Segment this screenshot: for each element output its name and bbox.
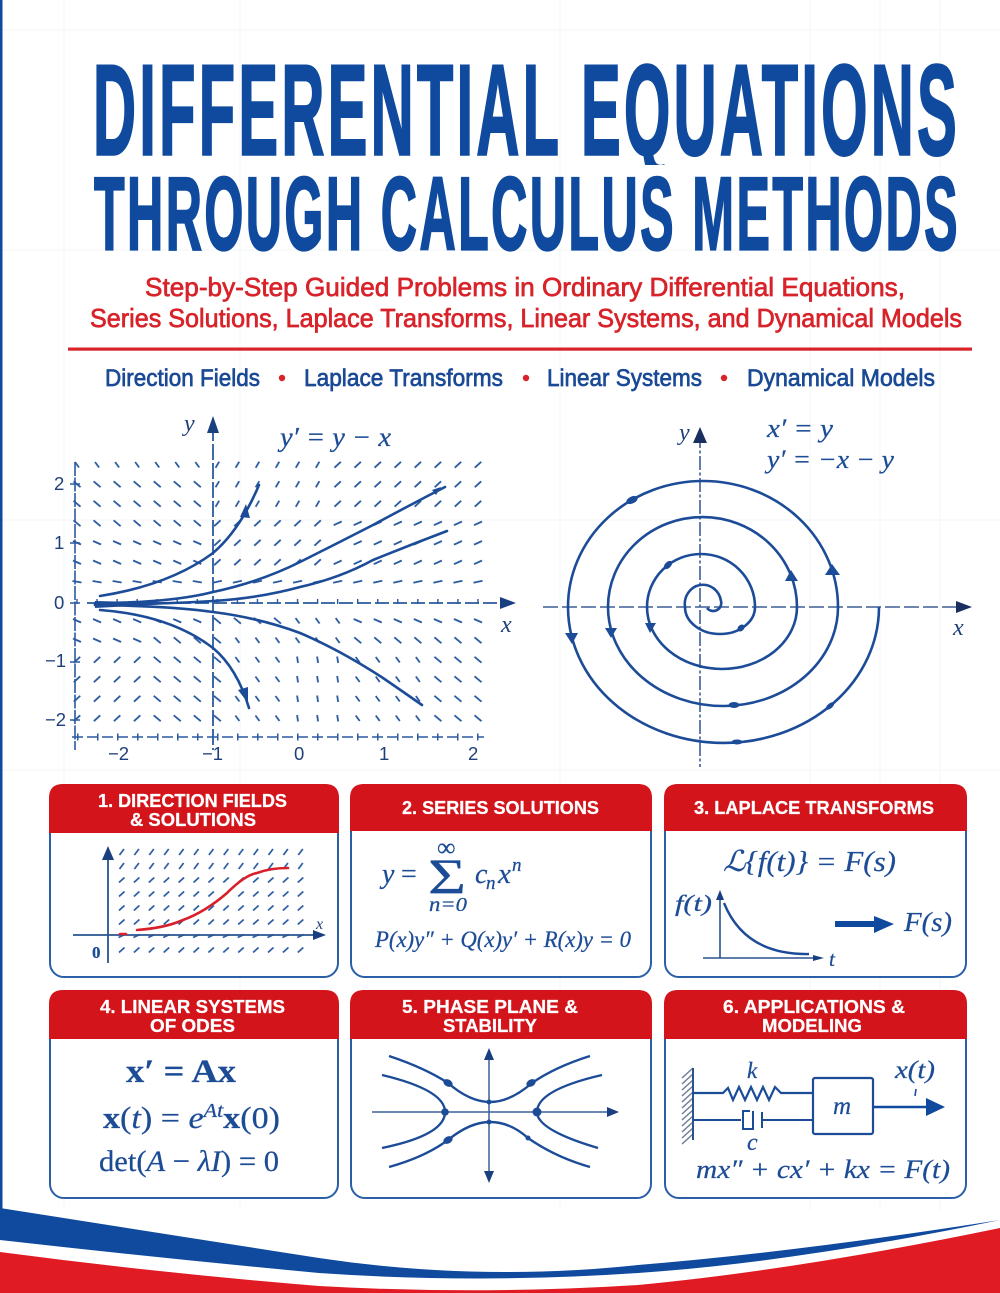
laplace formula: ℒ{f(t)} = F(s) bbox=[723, 846, 896, 878]
direction markers bbox=[565, 494, 840, 744]
topic navigation row: Direction Fields bbox=[105, 365, 260, 392]
panel 3: laplace transforms bbox=[664, 784, 967, 977]
F(s) label: F(s) bbox=[903, 907, 952, 937]
series formula: n bbox=[486, 873, 496, 894]
panel 4 heading bbox=[100, 997, 285, 1036]
topic navigation row: Laplace Transforms bbox=[304, 365, 503, 392]
axis labels: 1 bbox=[54, 532, 64, 553]
axis labels: −2 bbox=[108, 743, 129, 764]
matrix equations: det(A − λI) = 0 bbox=[99, 1145, 279, 1178]
axis labels: 2 bbox=[468, 743, 478, 764]
panel 6 heading: MODELING bbox=[762, 1016, 862, 1036]
chart: spiral phase portrait bbox=[543, 414, 972, 767]
series formula: n bbox=[512, 855, 522, 876]
panel 5 heading: 5. PHASE PLANE & bbox=[402, 997, 578, 1017]
equation of motion: mx″ + cx′ + kx = F(t) bbox=[696, 1155, 950, 1184]
panel 2 heading: 2. SERIES SOLUTIONS bbox=[402, 798, 599, 818]
panel 6: applications and modeling bbox=[664, 990, 967, 1198]
decay graph: t bbox=[829, 947, 836, 971]
chart: spiral phase portrait: x bbox=[952, 615, 964, 641]
axis labels and system equations: y bbox=[677, 420, 690, 446]
axis labels: y bbox=[182, 411, 195, 437]
matrix equations: x bbox=[223, 1100, 241, 1135]
axis labels: 0 bbox=[54, 592, 64, 613]
spring mass damper diagram: m bbox=[833, 1093, 851, 1120]
axis labels: −2 bbox=[45, 709, 66, 730]
decay graph: f(t) bbox=[675, 891, 712, 916]
title bbox=[94, 63, 956, 252]
panel 3 heading: 3. LAPLACE TRANSFORMS bbox=[694, 798, 934, 818]
panel 1: direction fields and solutions bbox=[49, 784, 339, 977]
axis labels: 0 bbox=[294, 743, 304, 764]
matrix equations: At bbox=[201, 1100, 224, 1122]
matrix equations bbox=[99, 1054, 280, 1178]
axes bbox=[70, 425, 505, 750]
mini slope field chart bbox=[73, 845, 326, 963]
panel 5: phase plane and stability bbox=[350, 990, 652, 1198]
panel 1 heading bbox=[98, 791, 287, 830]
axis labels: −1 bbox=[45, 650, 66, 671]
matrix equations: x′ = Ax bbox=[126, 1054, 237, 1090]
chart: spiral phase portrait: y′ = −x − y bbox=[764, 445, 894, 474]
transform arrow bbox=[835, 916, 894, 933]
panel 1 heading: 1. DIRECTION FIELDS bbox=[98, 791, 287, 811]
bottom wave: red band bbox=[0, 1228, 1000, 1293]
axis labels: 1 bbox=[379, 743, 389, 764]
panel 6 heading bbox=[723, 997, 905, 1036]
panel 1 heading: & SOLUTIONS bbox=[130, 810, 256, 830]
spring mass damper diagram: k bbox=[747, 1058, 758, 1083]
series formula: ∞ bbox=[437, 833, 456, 862]
slope field segments bbox=[67, 455, 488, 728]
series formula: x bbox=[497, 858, 511, 890]
panel 2: series solutions bbox=[350, 784, 652, 977]
decay graph bbox=[675, 890, 836, 971]
panel 4 heading: 4. LINEAR SYSTEMS bbox=[100, 997, 285, 1017]
series formula: y bbox=[379, 859, 395, 890]
series formula: n=0 bbox=[429, 894, 467, 916]
series formula: c bbox=[475, 859, 488, 890]
panel 6 heading: 6. APPLICATIONS & bbox=[723, 997, 905, 1017]
spring mass damper diagram: c bbox=[747, 1130, 758, 1156]
spiral trajectory bbox=[568, 481, 879, 743]
panel 4 heading: OF ODES bbox=[150, 1016, 235, 1036]
mini slope field chart: x bbox=[315, 916, 323, 933]
subtitle bbox=[90, 272, 962, 333]
bottom wave: blue band bbox=[0, 1208, 1000, 1278]
topic navigation row bbox=[105, 365, 935, 392]
panel 5 heading bbox=[402, 997, 578, 1036]
left edge stripe bbox=[0, 0, 2, 1210]
mini slope field chart: 0 bbox=[92, 943, 100, 962]
panel 5 heading: STABILITY bbox=[443, 1016, 537, 1036]
ode formula: P(x)y″ + Q(x)y′ + R(x)y = 0 bbox=[374, 927, 631, 952]
matrix equations: x(t) = e bbox=[103, 1100, 202, 1135]
topic navigation row: Dynamical Models bbox=[747, 365, 935, 392]
axis labels: y′ = y − x bbox=[277, 422, 391, 452]
panel 4: linear systems of odes bbox=[49, 990, 339, 1198]
subtitle line 2: Series Solutions, Laplace Transforms, Linear Systems, and Dynamical Models bbox=[90, 303, 962, 333]
axis labels: x bbox=[500, 612, 512, 638]
chart: spiral phase portrait: x′ = y bbox=[766, 414, 834, 443]
spring mass damper diagram: x(t) bbox=[894, 1057, 935, 1084]
axis labels: −1 bbox=[202, 743, 223, 764]
axis labels bbox=[45, 411, 512, 764]
series formula: Σ bbox=[428, 848, 466, 904]
series formula: = bbox=[401, 859, 417, 890]
chart: direction field y' = y - x bbox=[45, 411, 516, 764]
saddle point diagram bbox=[372, 1048, 619, 1183]
axis labels: 2 bbox=[54, 473, 64, 494]
solution curves bbox=[95, 485, 447, 708]
series formula bbox=[379, 833, 522, 916]
topic navigation row: Linear Systems bbox=[547, 365, 702, 392]
axes bbox=[543, 434, 962, 767]
subtitle line 1: Step-by-Step Guided Problems in Ordinary Differential Equations, bbox=[145, 272, 905, 302]
spring mass damper diagram bbox=[682, 1057, 945, 1156]
matrix equations: (0) bbox=[240, 1100, 276, 1135]
